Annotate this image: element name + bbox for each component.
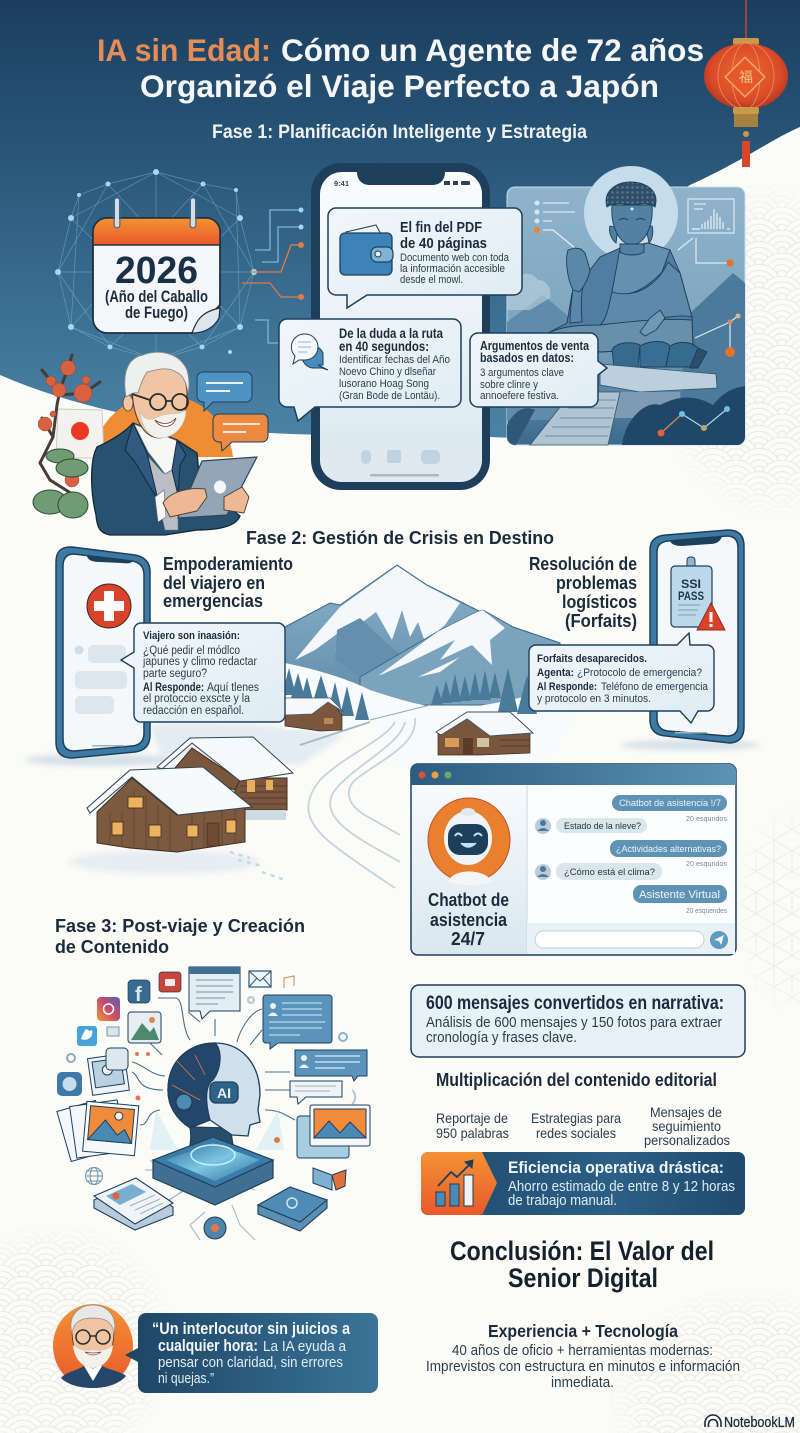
chat message list: 20 esqundos [686,816,728,823]
heading: multiplicacion: Multiplicación del contenido editorial [436,1070,717,1090]
illustration: senior with tablet [92,352,257,535]
text: experiencia + tecnologia: Experiencia + Tecnología [488,1321,678,1341]
illustration: orange disc [92,394,233,457]
terrace and stairs [507,364,745,445]
text: mensajes: seguimiento [652,1118,721,1134]
document bubble [189,967,240,1019]
bubble: duda a ruta: Noevo Chino y dlseñar [339,366,436,378]
header background swoosh [0,0,800,441]
text: empoderamiento: emergencias [163,591,263,611]
central phone: 9:41 [334,179,349,188]
text: resolucion [529,554,637,631]
bubble: duda a ruta: De la duda a la ruta [339,326,443,341]
bubble: viajero: japunes y climo redactar [142,656,257,668]
phone: emergency [56,547,150,758]
text: reportaje: Reportaje de [436,1110,508,1126]
processor chip [153,1137,273,1205]
bubble: argumentos de venta: Argumentos de venta [480,338,590,353]
icon: wallet [340,225,393,275]
bubble: fin del PDF: la información accesible [400,263,505,275]
phone: forfaits [650,530,744,743]
bubble: forfaits: Forfaits desaparecidos. [537,653,647,665]
bubble: argumentos de venta [470,333,607,407]
title: Organizó el Viaje Perfecto a Japón [140,68,659,104]
icon: orange chat bubble [213,414,268,451]
bubble: fin del PDF: desde el mowl. [400,274,463,286]
social icons: f [135,984,142,1006]
bubble: viajero: Al Responde: [143,682,204,694]
quote bubble [125,1313,378,1393]
title: Cómo un Agente de 72 años [281,32,704,68]
bubble: argumentos de venta: annoefere festiva. [480,390,559,402]
circuit connectors [242,210,301,343]
bubble: forfaits: Teléfono de emergencia [601,681,709,693]
icon: send [710,931,728,949]
bubble: viajero: redacción en español. [143,705,244,717]
text: mensajes: Mensajes de [650,1104,722,1120]
cabin: small [285,698,344,731]
chat message list: 20 esqundos [686,861,728,868]
text: experiencia + tecnologia: Imprevistos con estructura en minutos e información [426,1359,740,1375]
quote bubble: ni quejas.” [158,1370,214,1387]
panel: chatbot window: asistencia [430,909,508,930]
text: reportaje: 950 palabras [436,1125,509,1141]
text: resolucion: problemas [556,573,637,593]
icon: chat bubbles [291,334,328,370]
text: estrategias: redes sociales [536,1125,616,1141]
calendar 2026: (Año del Caballo [105,287,208,306]
heading: conclusion: Senior Digital [508,1263,658,1293]
text: empoderamiento [163,554,293,611]
blue message cards [263,995,367,1104]
text: empoderamiento: del viajero en [163,573,265,593]
chat message list: ¿Actividades alternativas? [616,844,721,855]
AI head [168,1043,260,1158]
bubble: viajero: Aquí tlenes [207,682,259,694]
globe [86,1168,102,1184]
heading: conclusion [450,1236,714,1293]
icon: medical cross [87,584,131,628]
text: resolucion: Resolución de [529,554,637,574]
bubble: duda a ruta [279,319,461,421]
chat message list [535,795,728,915]
buddha statue [548,182,707,368]
small projector [313,1168,346,1190]
heading: fase 3 [55,915,305,957]
panel: 600 mensajes: Análisis de 600 mensajes y 150 fotos para extraer [426,1014,722,1031]
text: mensajes: personalizados [644,1132,730,1148]
cabin: right [436,712,533,755]
panel: 600 mensajes: 600 mensajes convertidos en narrativa: [426,993,724,1014]
text: mensajes [644,1104,730,1148]
bubble: duda a ruta: (Gran Bode de Lontäu). [339,390,440,402]
chat message list: Estado de la nleve? [564,821,641,832]
gear [204,1217,226,1239]
connector arrows [132,998,295,1125]
landscape card [128,1012,161,1043]
illustration: japanese decor [33,355,104,518]
bubble: duda a ruta: lusorano Hoag Song [339,378,429,390]
heading: fase 2: Fase 2: Gestión de Crisis en Destino [246,527,554,548]
title [97,32,704,104]
heading: conclusion: Conclusión: El Valor del [450,1236,714,1266]
text: experiencia + tecnologia [426,1321,740,1391]
bubble: forfaits: ¿Protocolo de emergencia? [577,667,702,679]
text: empoderamiento: Empoderamiento [163,554,293,574]
icon: ski pass badge [671,557,712,627]
text: experiencia + tecnologia: 40 años de oficio + herramientas modernas: [452,1343,713,1359]
panel: chatbot window: 24/7 [451,928,485,949]
bubble: forfaits: Al Responde: [537,681,597,693]
right device [258,1187,327,1231]
chat message list: Chatbot de asistencia !/7 [619,798,721,809]
text: estrategias: Estrategias para [531,1110,621,1126]
snow hills [285,663,430,730]
panel: chatbot window [411,764,736,955]
social icons [57,971,355,1104]
chat message list: Asistente Virtual [639,889,720,901]
calendar 2026: 2026 [115,250,198,292]
bubble: fin del PDF: de 40 páginas [400,235,487,252]
chat message list: 20 esquendes [686,908,727,915]
panel: 600 mensajes: cronología y frases clave. [426,1029,577,1046]
bubble: viajero: ¿Qué pedir el módlco [143,645,240,657]
icon: warning triangle [697,603,725,630]
UI overlay on panel [543,199,738,352]
icon: red lantern [704,0,788,167]
bubble: duda a ruta: Identificar fechas del Año [339,354,450,366]
portrait: senior [53,1304,133,1388]
snowfield shading [25,723,760,874]
network around calendar [58,172,254,360]
icon: growth chart [436,1160,473,1206]
quote bubble: “Un interlocutor sin juicios a [152,1320,351,1338]
heading: fase 3: Fase 3: Post-viaje y Creación [55,915,305,936]
pine trees [282,668,537,720]
bubble: viajero: Viajero son inaasión: [143,630,240,642]
bubble: duda a ruta: en 40 segundos: [339,339,429,354]
panel: 600 mensajes [411,985,745,1057]
central phone [311,163,490,490]
text: reportaje [436,1110,509,1141]
cabin: large front [87,767,252,852]
quote bubble: La IA eyuda a [263,1338,347,1355]
chat message list: ¿Cómo está el clima? [564,867,655,878]
icon: ski pass badge: SSI [681,579,701,591]
illustration: AI content hub [57,967,370,1240]
banner: eficiencia: Eficiencia operativa drástica: [508,1159,724,1177]
bubble: argumentos de venta: 3 argumentos clave [480,367,564,379]
text: resolucion: logísticos [562,592,637,612]
icon: blue chat bubble [197,372,252,411]
banner: eficiencia [421,1152,745,1215]
text: resolucion: (Forfaits) [565,611,637,631]
text: estrategias [531,1110,621,1141]
banner: eficiencia: de trabajo manual. [508,1193,617,1209]
panel: buddha illustration [507,166,745,445]
bubble: viajero [121,623,285,722]
text: experiencia + tecnologia: inmediata. [551,1375,614,1391]
bubble: argumentos de venta: basados en datos: [480,350,574,365]
quote bubble: cualquier hora: [158,1337,258,1355]
banner: eficiencia: Ahorro estimado de entre 8 y 12 horas [508,1179,735,1195]
panel: chatbot window: Chatbot de [428,889,509,910]
bubble: viajero: el protoccio exscte y la [143,693,251,705]
photo cards [57,1048,370,1161]
calendar 2026 [93,198,220,333]
bubble: forfaits: Agenta: [537,667,574,679]
title: IA sin Edad: [97,32,271,68]
bubble: viajero: parte seguro? [143,668,207,680]
bubble: fin del PDF: El fin del PDF [400,219,482,236]
bubble: forfaits [529,633,714,723]
bubble: forfaits: y protocolo en 3 minutos. [537,693,651,705]
illustration: mountain range [282,565,575,770]
heading: fase 3: de Contenido [55,936,169,957]
bubble: fin del PDF [328,208,522,308]
ski trails [300,718,415,888]
quote bubble: pensar con claridad, sin errores [158,1354,343,1371]
icon: ski pass badge: PASS [678,591,704,603]
calendar 2026: de Fuego) [125,303,188,322]
bubble: fin del PDF: Documento web con toda [400,252,510,264]
icon: red lantern: 福 [739,69,753,85]
heading: fase 1: Fase 1: Planificación Inteligente y Estrategia [212,122,587,143]
AI head: AI [217,1085,231,1101]
left device [94,1178,173,1230]
icon: robot [428,798,510,885]
bubble: argumentos de venta: sobre clinre y [480,379,538,391]
cabin: large back [157,737,293,820]
